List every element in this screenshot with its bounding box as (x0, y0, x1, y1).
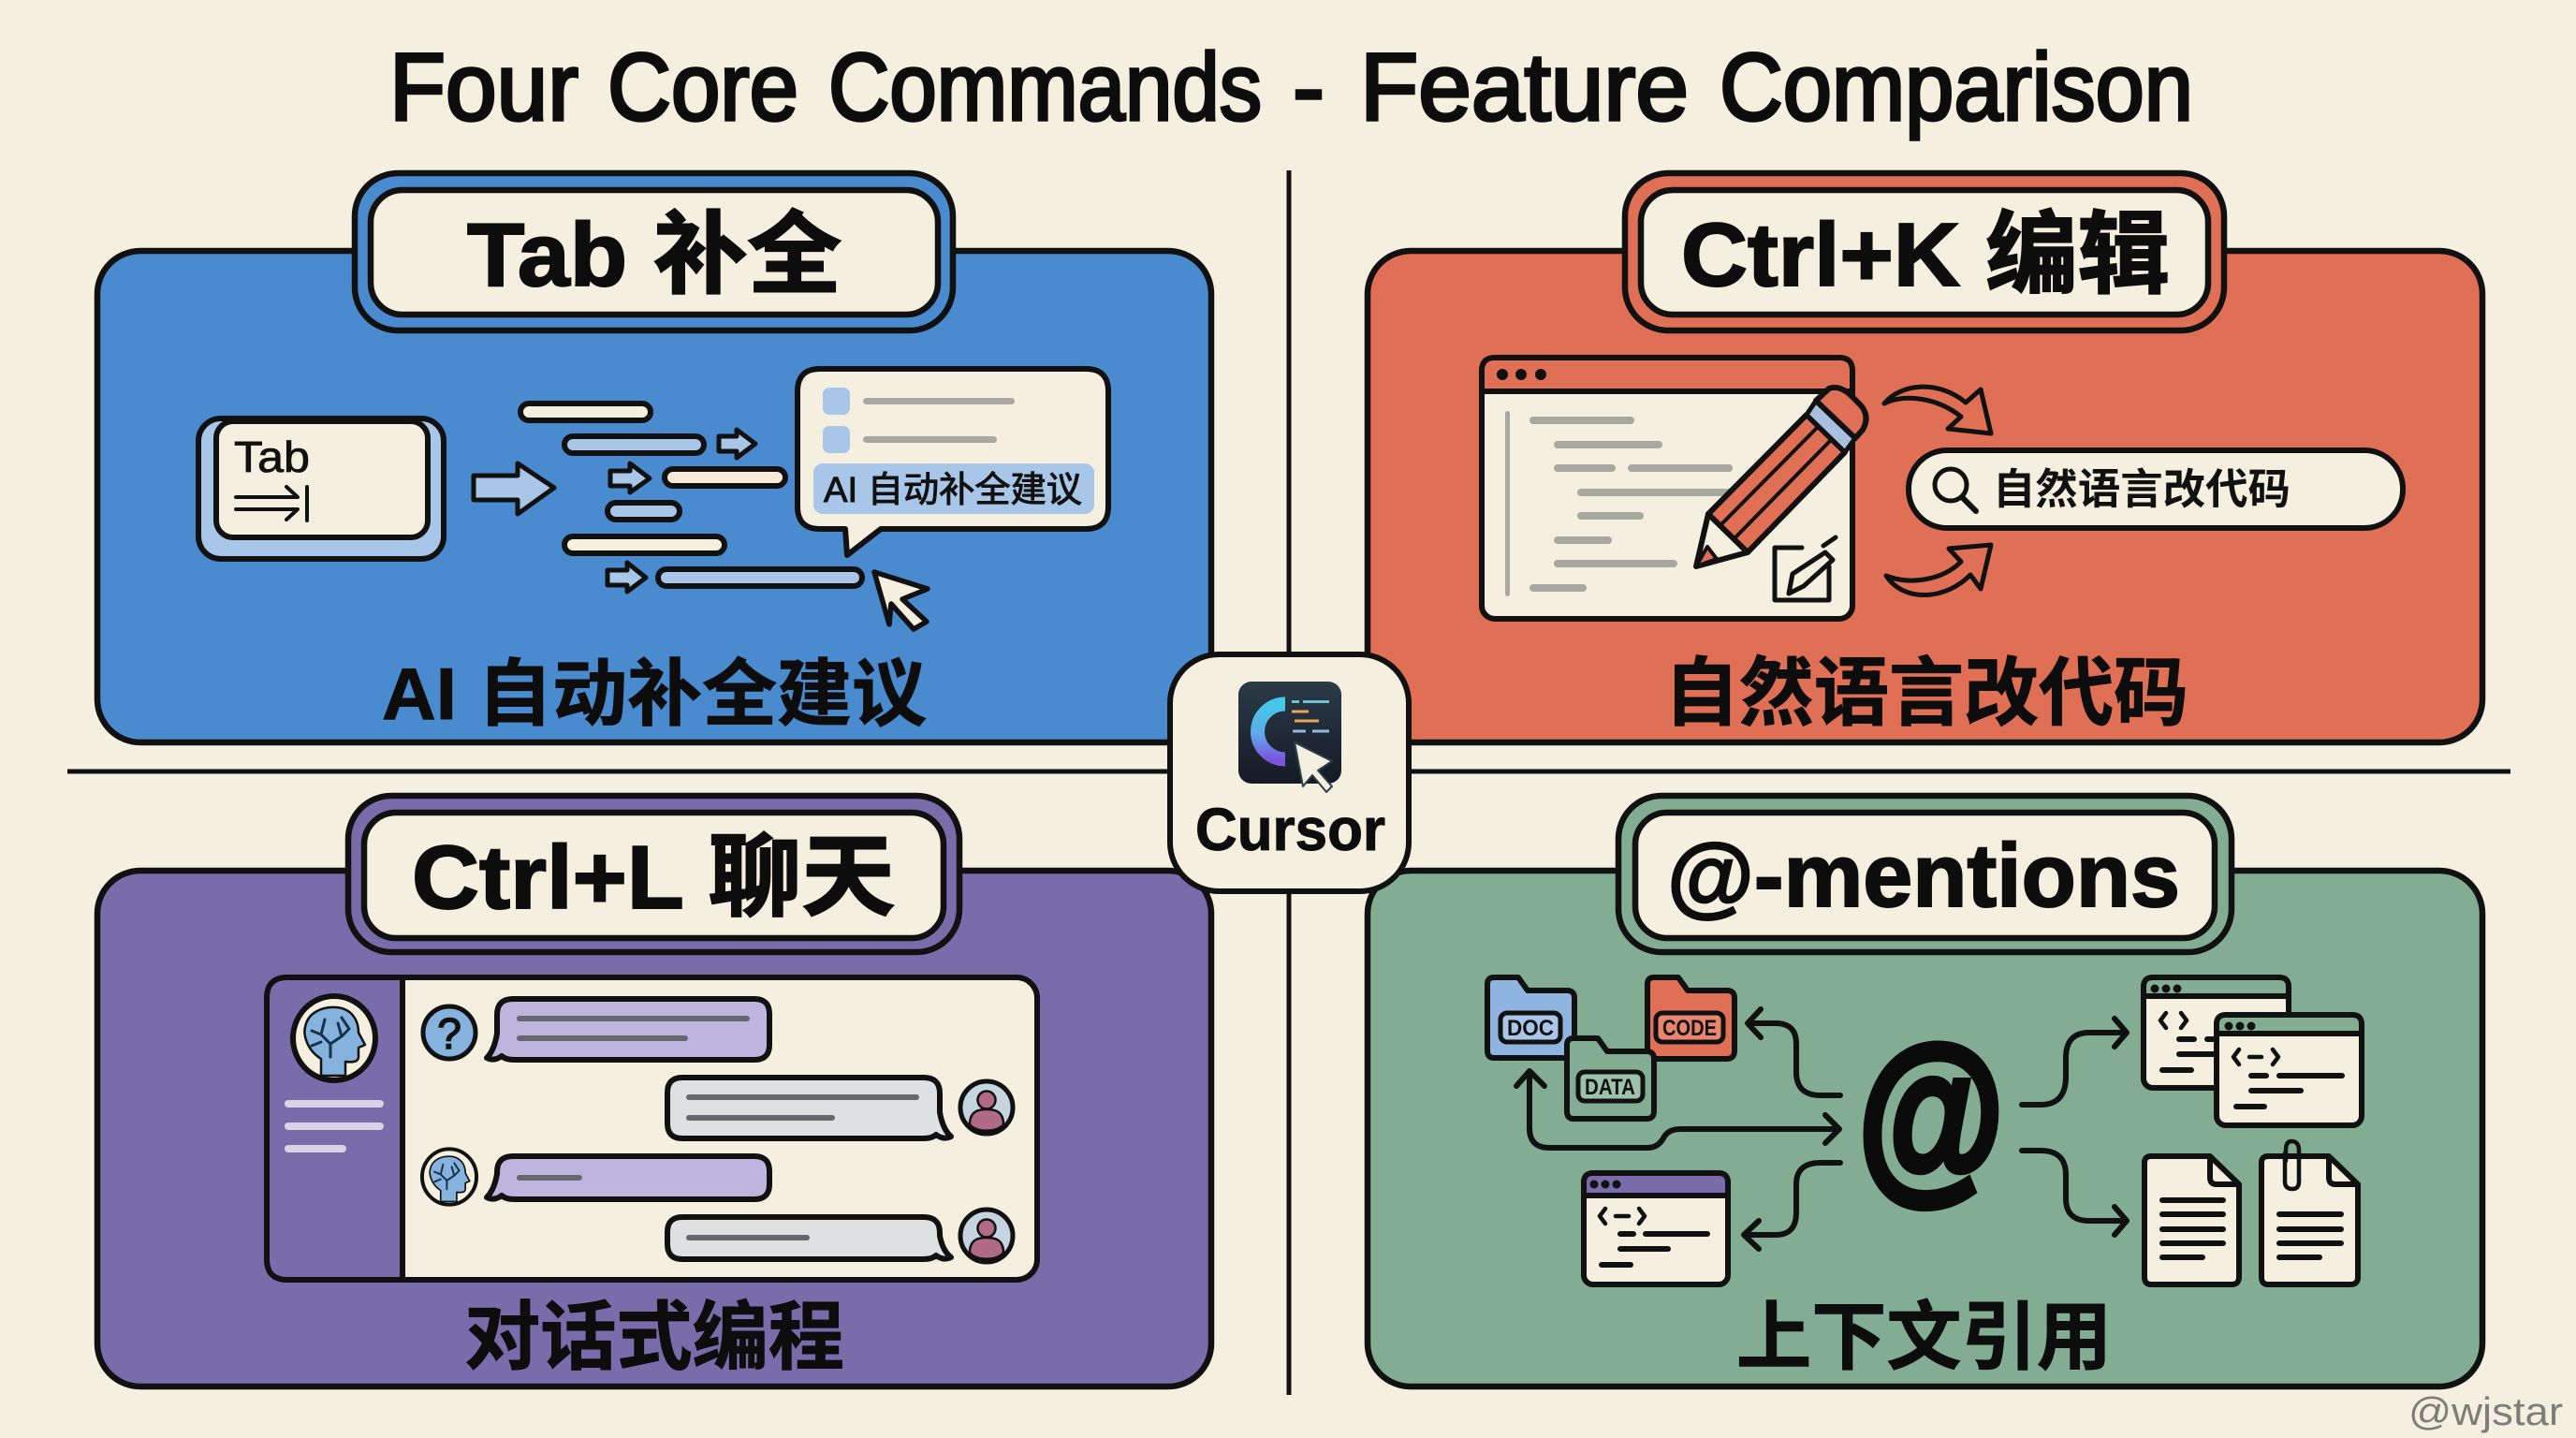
arrow: curved top (1884, 387, 1991, 433)
chat window (267, 977, 1037, 1280)
panel background: red (1368, 251, 2482, 742)
caption: AI 自动补全建议 (382, 653, 927, 735)
small arrows (607, 430, 755, 592)
center badge: Cursor (1170, 654, 1409, 891)
tab heading: Ctrl+L 聊天: Ctrl+L 聊天 (412, 828, 895, 928)
bubble: question two (487, 1156, 769, 1199)
panel background: green (1368, 871, 2482, 1387)
title: Core (607, 34, 798, 140)
tab heading: Tab 补全 (355, 173, 953, 330)
panel background: blue (97, 251, 1211, 742)
arrows: left connectors (1516, 1009, 1840, 1249)
icon: user avatar (960, 1081, 1013, 1134)
icon: Tab key (198, 418, 444, 559)
folder: DOC: DOC (1507, 1016, 1554, 1041)
icon: Cursor logo (1238, 682, 1341, 792)
arrow: curved bottom (1886, 545, 1991, 595)
icon: document (2144, 1156, 2239, 1284)
caption: 自然语言改代码 (1664, 652, 2188, 735)
search pill: 自然语言改代码 (1993, 465, 2291, 513)
caption: 上下文引用 (1736, 1296, 2112, 1379)
bubble: reply two (667, 1217, 951, 1259)
title: Commands (828, 34, 1262, 140)
suggestion bubble: AI 自动补全建议 (824, 471, 1082, 510)
arrow: key to code (474, 463, 554, 514)
icon: edit square (1775, 537, 1836, 600)
tab heading: @-mentions: @-mentions (1667, 826, 2180, 926)
window: purple title bar (1584, 1173, 1728, 1284)
panel: Ctrl+L chat (97, 796, 1211, 1387)
folder: CODE (1647, 977, 1734, 1059)
icon: pencil (1696, 388, 1866, 566)
code editor window (1482, 358, 1852, 619)
watermark: @wjstar (2408, 1389, 2563, 1433)
title: Comparison (1720, 34, 2193, 140)
icon: Tab key: Tab (234, 433, 310, 481)
panel: Ctrl+K edit (1368, 173, 2482, 742)
window: code front (2217, 1015, 2362, 1125)
tab heading: Ctrl+K 编辑 (1625, 173, 2224, 330)
tab heading: Ctrl+L 聊天 (348, 796, 959, 952)
icon: mouse cursor (874, 572, 928, 629)
panel: Tab completion (97, 173, 1211, 742)
chat sidebar (267, 977, 402, 1280)
panel: @-mentions (1368, 796, 2482, 1387)
icon: question: ? (437, 1009, 461, 1058)
window: code back (2144, 977, 2289, 1088)
title: - (1293, 34, 1325, 140)
search pill (1909, 450, 2403, 528)
tab heading: Tab 补全: Tab 补全 (467, 205, 842, 305)
panel background: purple (97, 871, 1211, 1387)
label: Cursor: Cursor (1195, 796, 1385, 863)
tab heading: Ctrl+K 编辑: Ctrl+K 编辑 (1681, 205, 2170, 305)
folder: DATA: DATA (1585, 1075, 1635, 1100)
icon: large at sign: @ (1858, 1009, 2004, 1218)
icon: question (423, 1006, 476, 1059)
icon: document with paperclip (2261, 1141, 2358, 1284)
title: Four (389, 34, 578, 140)
icon: brain head small (422, 1149, 476, 1205)
folder: DOC (1487, 977, 1574, 1058)
folder: CODE: CODE (1662, 1016, 1717, 1041)
code completion lines (520, 404, 862, 586)
bubble: reply (667, 1078, 951, 1138)
caption: 对话式编程 (464, 1296, 844, 1379)
title (389, 34, 2193, 140)
arrows: right connectors (2022, 1019, 2127, 1235)
tab heading: @-mentions (1618, 796, 2232, 952)
suggestion bubble (798, 369, 1108, 555)
folder: DATA (1567, 1038, 1654, 1119)
icon: user avatar two (960, 1210, 1013, 1262)
bubble: user question (487, 999, 769, 1060)
title: Feature (1360, 34, 1689, 140)
